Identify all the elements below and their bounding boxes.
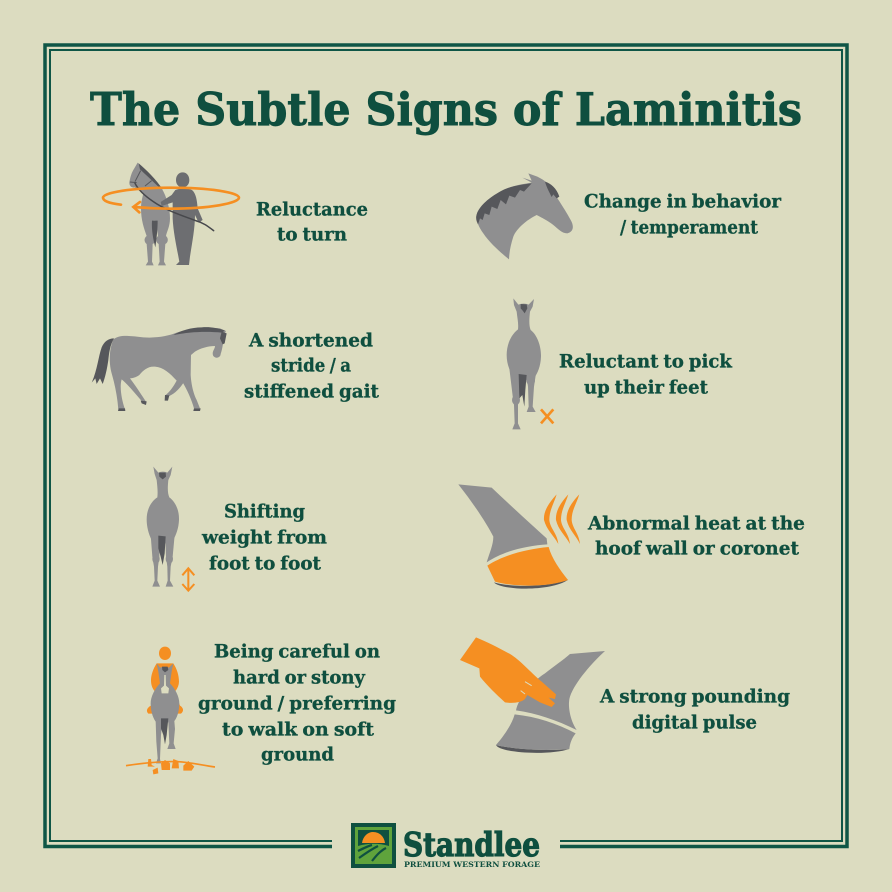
text: change in behavior: / temperament xyxy=(620,218,758,238)
text: being careful xyxy=(198,642,396,766)
icon: horse rear view shifting weight xyxy=(147,467,194,591)
text: abnormal heat: Abnormal heat at the xyxy=(587,514,805,534)
text: shortened stride xyxy=(244,330,379,402)
text: reluctant to pick: up their feet xyxy=(584,378,708,398)
logo tagline: PREMIUM WESTERN FORAGE xyxy=(404,860,540,869)
text: strong digital pulse: digital pulse xyxy=(632,712,757,734)
text: shifting weight: foot to foot xyxy=(209,554,321,574)
text: strong digital pulse xyxy=(599,686,790,734)
icon: rider on hard ground xyxy=(126,647,215,774)
logo: Standlee xyxy=(351,823,540,869)
logo wordmark: Standlee xyxy=(403,825,540,864)
text: strong digital pulse: A strong pounding xyxy=(599,686,790,708)
text: being careful: to walk on soft xyxy=(222,720,374,740)
logo mark xyxy=(351,823,396,868)
icon: hand on hoof xyxy=(460,637,605,753)
text: being careful: Being careful on xyxy=(214,642,381,662)
text: shifting weight: weight from xyxy=(201,528,327,548)
title: The Subtle Signs of Laminitis xyxy=(90,83,802,136)
text: abnormal heat: hoof wall or coronet xyxy=(595,538,799,560)
text: reluctance to turn xyxy=(256,200,368,246)
text: shortened stride: stride / a xyxy=(271,356,351,376)
icon: walking horse xyxy=(92,327,227,411)
handler xyxy=(161,172,203,265)
icon: hoof with heat xyxy=(458,484,580,589)
text: shortened stride: stiffened gait xyxy=(244,382,379,402)
text: being careful: ground / preferring xyxy=(198,694,396,714)
text: shifting weight: Shifting xyxy=(224,502,305,522)
text: reluctance to turn: to turn xyxy=(277,224,348,246)
text: change in behavior xyxy=(584,192,781,238)
text: shifting weight xyxy=(201,502,327,574)
text: abnormal heat xyxy=(587,514,805,560)
text: being careful: ground xyxy=(261,744,334,766)
text: reluctance to turn: Reluctance xyxy=(256,200,368,220)
icon: horse and handler turning xyxy=(103,163,239,265)
icon: horse head xyxy=(476,173,573,259)
icon: horse rear view with raised foot xyxy=(507,298,553,429)
text: reluctant to pick xyxy=(559,352,733,398)
text: change in behavior: Change in behavior xyxy=(584,192,781,212)
text: being careful: hard or stony xyxy=(233,668,366,688)
text: reluctant to pick: Reluctant to pick xyxy=(559,352,733,372)
text: shortened stride: A shortened xyxy=(248,330,373,352)
